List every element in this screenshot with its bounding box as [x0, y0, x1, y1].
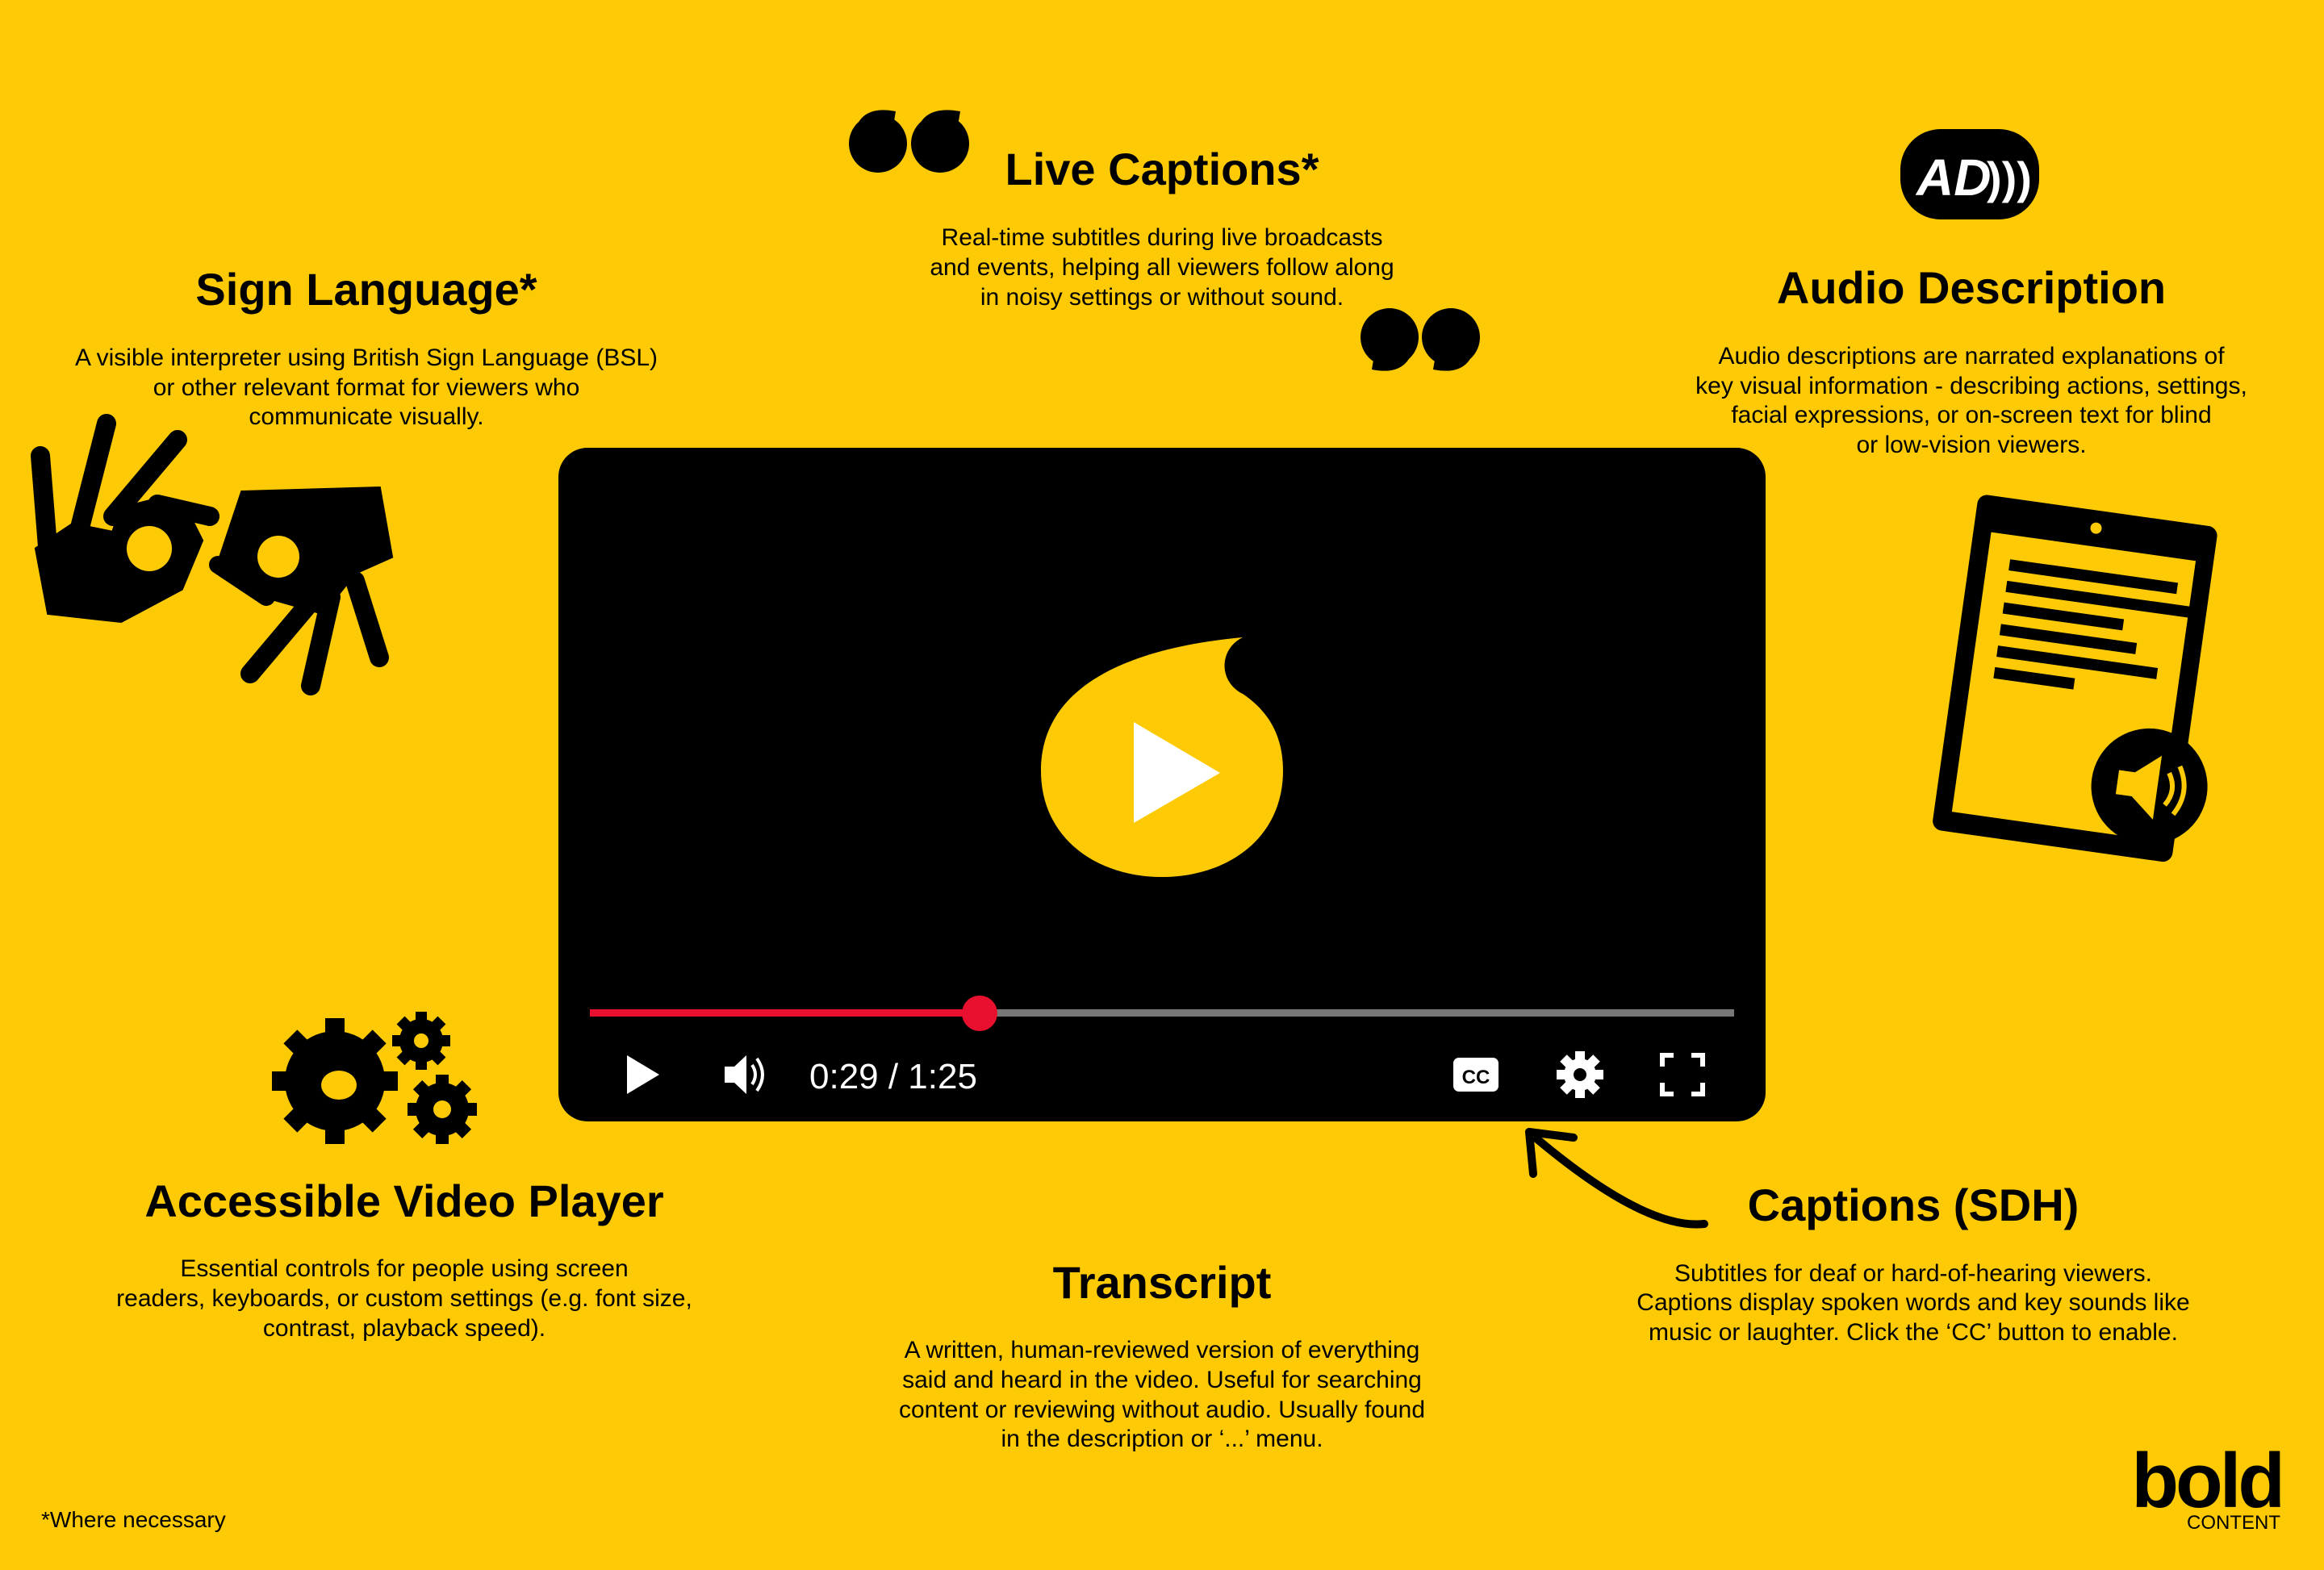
- footnote: *Where necessary: [41, 1507, 226, 1532]
- icon: tablet with speaker: [1932, 494, 2244, 866]
- text: audio description: key visual information - describing actions, settings,: [1695, 373, 2247, 399]
- text: transcript: in the description or ‘...’ menu.: [1001, 1426, 1323, 1452]
- text: accessible video player: Essential controls for people using screen: [180, 1255, 629, 1282]
- heading: sign language: Sign Language*: [195, 264, 537, 315]
- icon: play bubble: [1041, 637, 1283, 877]
- icon: audio description AD: AD: [1915, 148, 1991, 207]
- text: captions SDH: Subtitles for deaf or hard-of-hearing viewers.: [1674, 1260, 2152, 1287]
- icon: gears: [272, 1012, 477, 1144]
- controls: [627, 1051, 1703, 1098]
- text: sign language: communicate visually.: [249, 403, 484, 430]
- heading: audio description: Audio Description: [1777, 262, 2166, 313]
- icon: audio description AD: [1900, 129, 2039, 219]
- logo: bold content: bold: [2131, 1438, 2282, 1524]
- text: audio description: facial expressions, or on-screen text for blind: [1731, 402, 2212, 428]
- icon: signing hands: [36, 424, 391, 686]
- text: transcript: content or reviewing without audio. Usually found: [899, 1397, 1425, 1423]
- icon: quote marks open: [849, 110, 969, 173]
- icon: quote marks close: [1361, 308, 1480, 371]
- heading: transcript: Transcript: [1053, 1257, 1271, 1308]
- text: accessible video player: readers, keyboards, or custom settings (e.g. font size,: [116, 1285, 692, 1312]
- text: captions SDH: Captions display spoken words and key sounds like: [1636, 1289, 2190, 1316]
- controls: 0:29 / 1:25: [809, 1057, 977, 1096]
- icon: audio description AD: ))): [1987, 152, 2032, 203]
- heading: accessible video player: Accessible Video Player: [144, 1175, 664, 1226]
- text: transcript: A written, human-reviewed version of everything: [905, 1337, 1419, 1363]
- text: accessible video player: contrast, playback speed).: [263, 1315, 545, 1342]
- text: live captions: in noisy settings or without sound.: [980, 284, 1344, 311]
- text: sign language: or other relevant format for viewers who: [153, 374, 579, 401]
- text: audio description: Audio descriptions are narrated explanations of: [1718, 343, 2225, 370]
- text: transcript: said and heard in the video. Useful for searching: [902, 1367, 1422, 1393]
- arrow: to CC button: [1529, 1132, 1704, 1225]
- text: audio description: or low-vision viewers.: [1856, 432, 2087, 458]
- video player: [558, 448, 1766, 1121]
- text: live captions: and events, helping all viewers follow along: [930, 254, 1394, 281]
- text: sign language: A visible interpreter using British Sign Language (BSL): [75, 344, 658, 371]
- controls: CC: [1462, 1067, 1490, 1088]
- text: captions SDH: music or laughter. Click the ‘CC’ button to enable.: [1649, 1319, 2178, 1346]
- progress bar: [590, 996, 1734, 1031]
- heading: live captions: Live Captions*: [1005, 144, 1319, 194]
- heading: captions SDH: Captions (SDH): [1748, 1180, 2079, 1230]
- logo: bold content: CONTENT: [2187, 1512, 2280, 1534]
- text: live captions: Real-time subtitles during live broadcasts: [942, 224, 1382, 251]
